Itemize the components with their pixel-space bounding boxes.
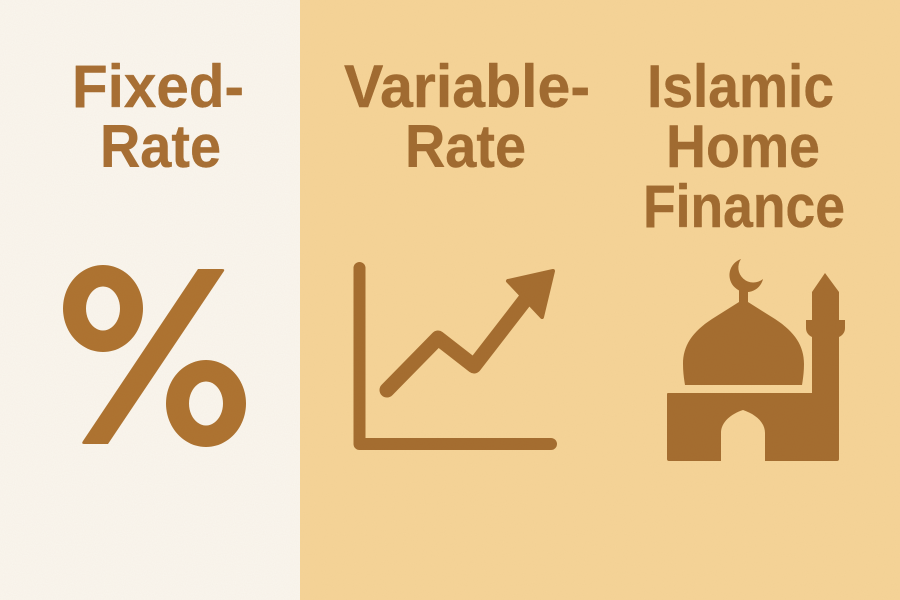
heading: Fixed-Rate [72,53,244,180]
heading: Fixed-Rate: Fixed- [72,53,244,120]
panel: fixed-rate [0,0,300,600]
heading: Variable-Rate: Variable- [344,53,590,120]
heading: Variable-Rate: Rate [405,113,526,180]
heading: Fixed-Rate: Rate [100,113,221,180]
chart axes [360,268,551,444]
icon: percent sign [63,265,246,447]
mosque base and minaret [667,273,845,461]
icon: rising line chart [360,268,553,444]
heading: Variable-Rate [344,53,590,180]
heading: Islamic Home Finance: Finance [643,173,845,240]
icon: mosque [667,259,845,461]
heading: Islamic Home Finance: Home [666,113,820,180]
chart arrow head [508,271,553,317]
mosque dome [683,290,804,385]
heading: Islamic Home Finance [643,53,845,240]
heading: Islamic Home Finance: Islamic [647,53,834,120]
panel: variable-rate and Islamic home finance [300,0,900,600]
chart rising line [387,300,525,390]
mosque crescent [729,259,763,292]
